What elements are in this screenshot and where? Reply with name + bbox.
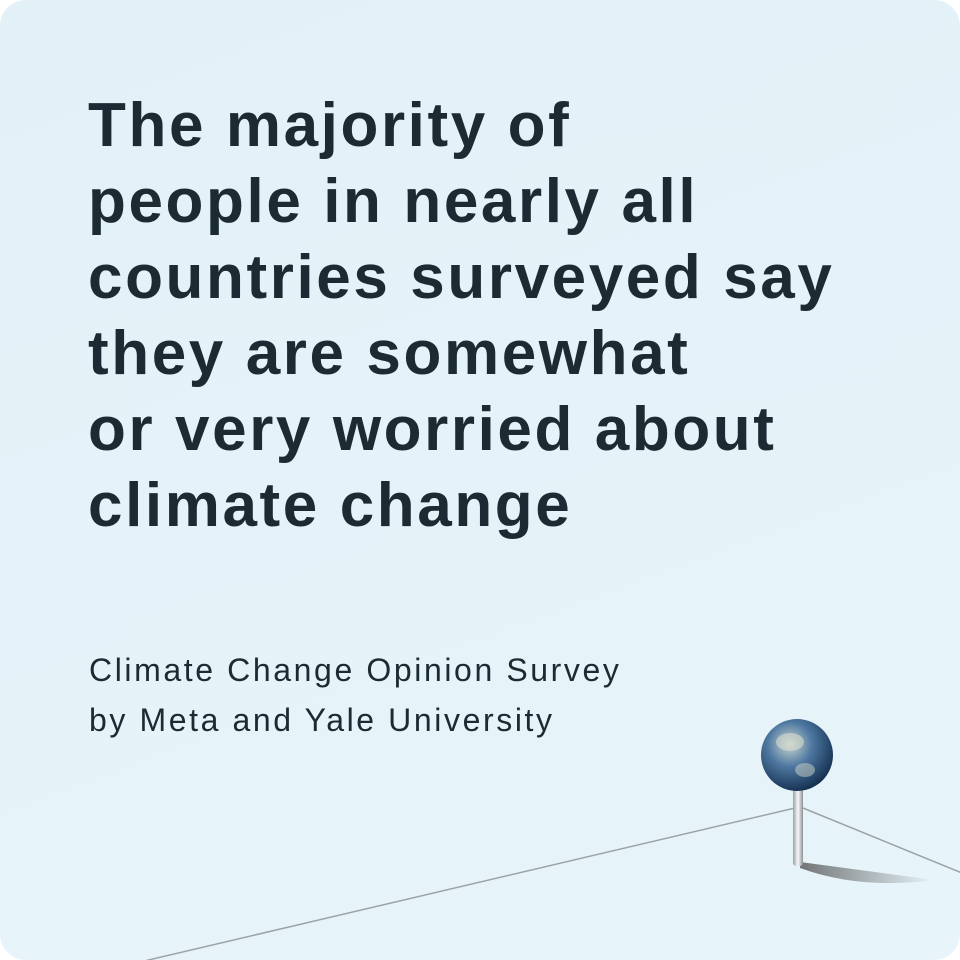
title: people in nearly all <box>88 167 698 236</box>
title: The majority of <box>88 91 571 160</box>
subtitle: source: by Meta and Yale University <box>89 702 555 738</box>
subtitle: source <box>89 652 622 738</box>
title <box>88 91 834 540</box>
title: countries surveyed say <box>88 243 834 312</box>
title: they are somewhat <box>88 319 690 388</box>
title: climate change <box>88 471 572 540</box>
title: or very worried about <box>88 395 777 464</box>
subtitle: source: Climate Change Opinion Survey <box>89 652 622 688</box>
